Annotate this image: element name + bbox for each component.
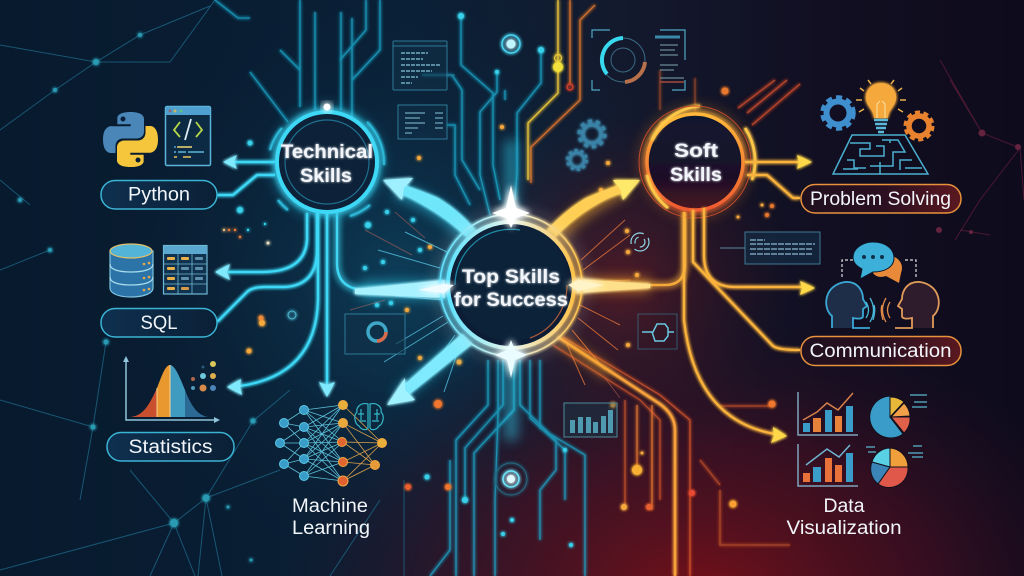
blue bubble: [853, 242, 894, 279]
circuit traces orange: [528, 0, 800, 576]
circuit nodes: [223, 13, 776, 547]
icon: code window: [166, 106, 210, 166]
pill: statistics: [107, 432, 234, 461]
spark: right: [568, 280, 604, 291]
panel: code box right: [720, 232, 820, 264]
label: machine learning: [292, 496, 370, 539]
icon: bell curve chart: [123, 356, 220, 423]
centre title: [454, 267, 568, 311]
panel: code window top: [393, 41, 455, 90]
brain: [355, 404, 383, 430]
pill: python: [101, 180, 217, 209]
centre title: for Success: [454, 290, 568, 311]
label: data visualization: [786, 496, 902, 539]
arrow: centre to machine learning: [387, 334, 472, 405]
circle: soft skills: [637, 104, 755, 220]
arrow: centre to technical: [383, 178, 482, 245]
arrowheads: soft: [771, 155, 815, 443]
connector: technical to centre: [337, 213, 440, 290]
left head: [826, 282, 870, 328]
centre title: Top Skills: [462, 267, 560, 288]
connector: lower orange trace: [558, 337, 675, 576]
title: Skills: [300, 165, 352, 187]
bulb: [866, 83, 896, 118]
pill: python: Python: [128, 184, 190, 206]
pill: communication: Communication: [810, 341, 952, 362]
connectors: soft branches: [684, 162, 802, 434]
panel: mini bar chart: [564, 403, 617, 437]
gear blue: [822, 98, 854, 128]
circuit traces teal: [215, 0, 585, 576]
vertical beams: [510, 48, 512, 475]
right head: [895, 282, 939, 328]
pie lower: [871, 448, 908, 488]
icon: gears centre right: [568, 122, 604, 170]
radial rays around centre: [350, 212, 630, 398]
spark: top: [492, 185, 530, 228]
top node: [502, 35, 520, 53]
label: data visualization: Data: [824, 496, 865, 517]
orange bubble: [871, 255, 902, 283]
pill: sql: SQL: [140, 313, 178, 334]
panel: dashboard top right: [592, 30, 685, 90]
maze: [833, 135, 928, 174]
background network left: [0, 0, 404, 576]
dashed links: [842, 260, 916, 277]
icon: loading ring: [631, 233, 649, 251]
title: [281, 141, 373, 187]
pill: problem solving: Problem Solving: [810, 189, 951, 210]
pill: statistics: Statistics: [128, 437, 212, 458]
label: data visualization: Visualization: [786, 518, 902, 539]
pill: problem solving: [801, 184, 961, 213]
spark: left: [418, 284, 454, 293]
title: [670, 140, 722, 186]
icon: database: [110, 244, 153, 297]
rays: [856, 80, 906, 112]
label: machine learning: Learning: [292, 518, 370, 539]
arrow: centre to soft: [540, 180, 640, 245]
beam: left of centre: [355, 280, 445, 298]
chart lower: [798, 444, 858, 486]
pill: communication: [801, 336, 961, 366]
icon: python logo: [103, 112, 158, 167]
pie upper: [870, 396, 910, 438]
chart upper: [798, 392, 858, 435]
arrowheads: technical: [215, 155, 335, 397]
icon: data visualization charts: [798, 392, 927, 488]
beam: right of centre: [575, 279, 650, 293]
label: machine learning: Machine: [292, 496, 368, 517]
title: Technical: [281, 141, 373, 163]
sound waves: [866, 298, 875, 322]
circle: technical skills: [269, 104, 385, 220]
bottom node: [495, 463, 527, 495]
pill: sql: [101, 308, 217, 337]
bulb base: [874, 120, 888, 132]
panel: flow widget right: [638, 314, 677, 349]
title: Skills: [670, 164, 722, 186]
icon: table: [164, 246, 207, 294]
icon: problem solving: [822, 80, 932, 174]
spark: bottom: [495, 340, 527, 378]
icon: communication: [826, 242, 939, 328]
background network right: [936, 60, 1024, 240]
connectors: technical branches: [217, 162, 327, 386]
spark: [324, 104, 330, 110]
connector: soft to centre: [580, 212, 685, 285]
gear orange: [906, 112, 932, 140]
panel: donut widget left: [345, 314, 405, 354]
title: Soft: [674, 140, 719, 162]
halos behind central beams: [360, 140, 650, 440]
icon: neural network: [276, 400, 386, 486]
panel: table widget: [398, 105, 447, 139]
circle: top skills centre: [418, 185, 604, 378]
legend dashes: [866, 395, 927, 457]
